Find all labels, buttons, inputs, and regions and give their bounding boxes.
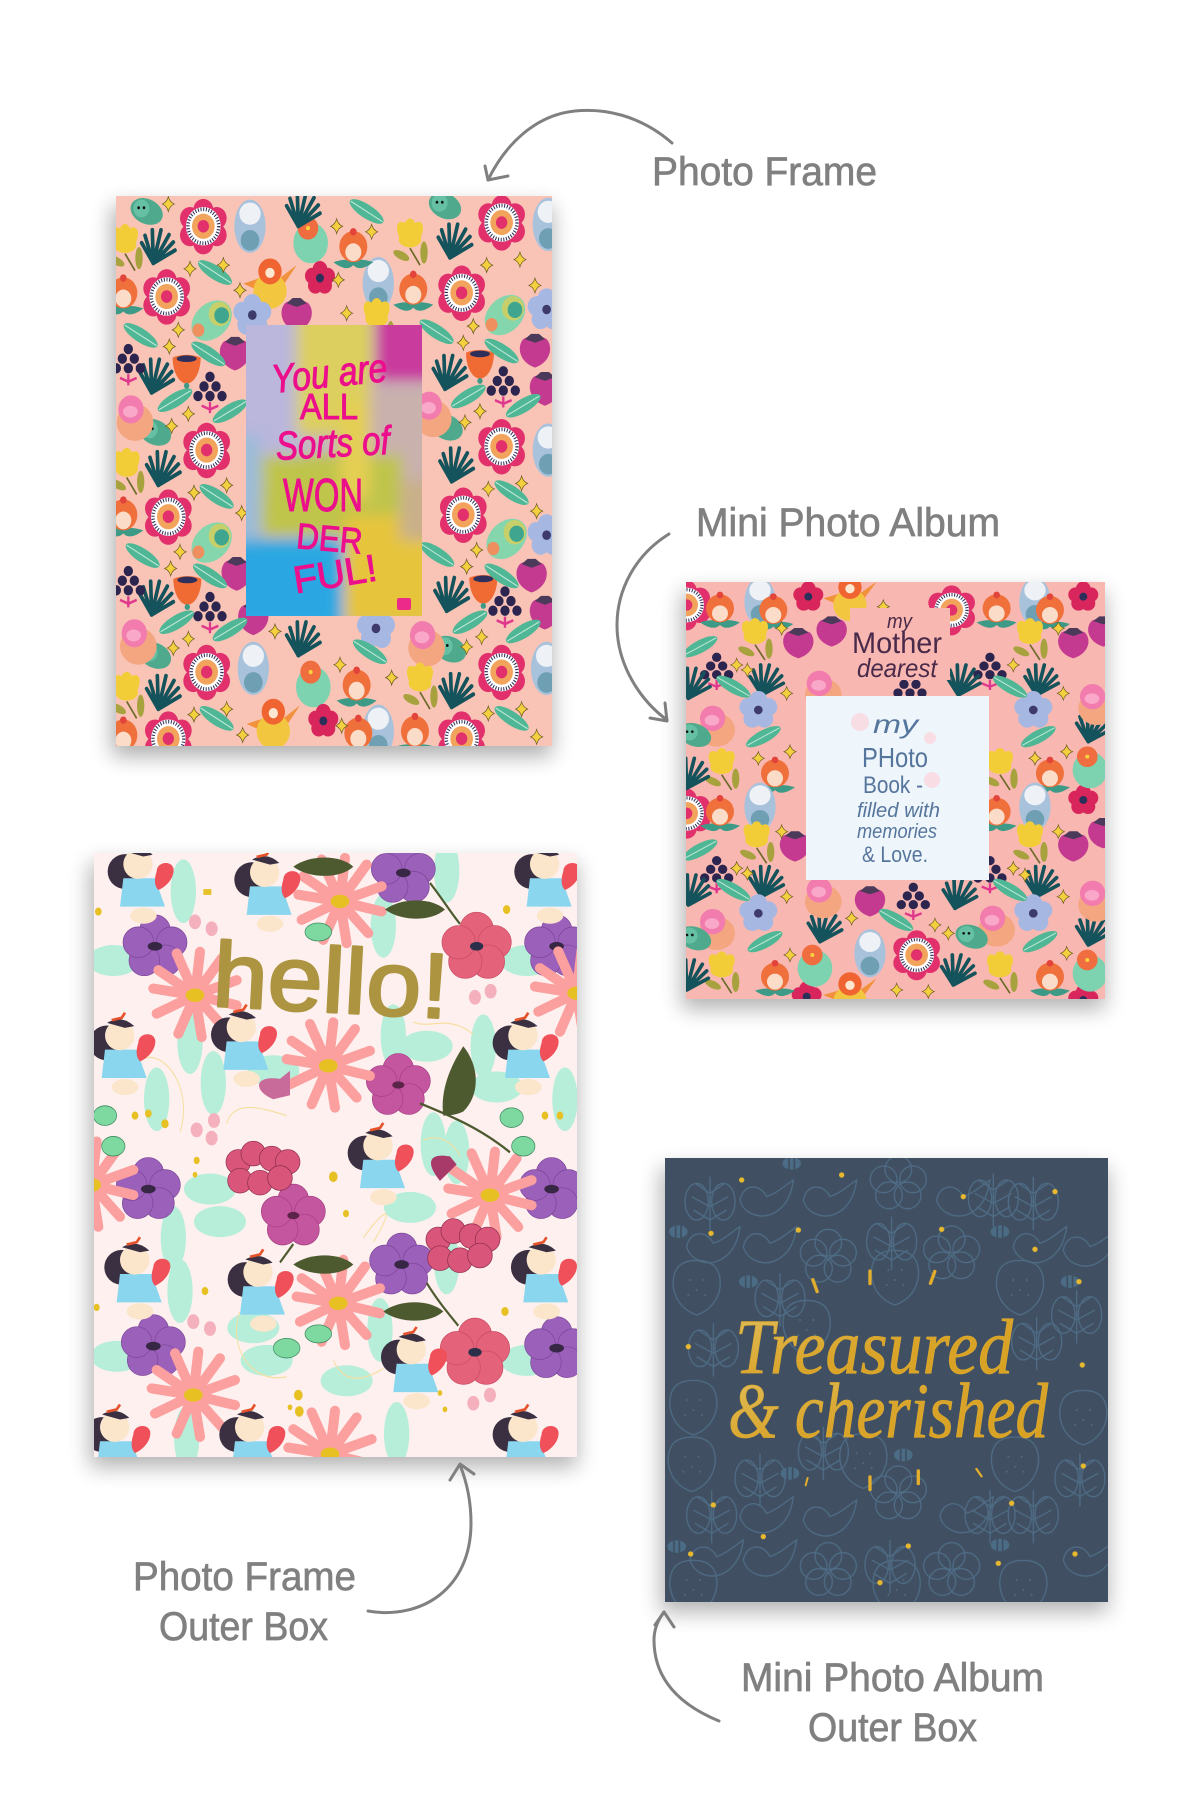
window lettering: FUL! [290, 548, 380, 602]
album window: Book - [863, 772, 923, 799]
label: mini photo album: Mini Photo Album [696, 501, 1000, 545]
frame photo window [246, 325, 422, 616]
window lettering: ALL [300, 386, 358, 427]
label: photo frame outer box: Photo Frame [133, 1555, 356, 1599]
album window [806, 696, 989, 880]
box lettering: & cherished [728, 1367, 1049, 1454]
box outline pattern [667, 1156, 1117, 1615]
box floral pattern [94, 853, 577, 1457]
arrow: mini photo album [617, 534, 669, 721]
label: mini photo album outer box: Mini Photo Album [741, 1656, 1044, 1700]
window lettering: You are [269, 346, 389, 402]
album title: my [887, 611, 913, 633]
album title: dearest [857, 653, 939, 683]
album window: filled with [857, 800, 940, 822]
window lettering: DER [295, 515, 364, 562]
panel: photo frame [103, 188, 566, 767]
album window: PHoto [862, 742, 928, 773]
frame floral pattern [103, 188, 566, 767]
arrow: photo frame outer box [368, 1464, 474, 1613]
label: photo frame outer box [133, 1555, 356, 1649]
window lettering: WON [283, 469, 363, 521]
album title [850, 608, 950, 683]
label: mini photo album outer box [741, 1656, 1044, 1750]
album window: & Love. [862, 842, 928, 867]
arrow: mini photo album outer box [654, 1612, 719, 1721]
hello lettering: hello! [210, 924, 451, 1038]
box lettering [728, 1303, 1049, 1454]
album window: my [873, 709, 921, 739]
box lettering: Treasured [735, 1303, 1014, 1390]
album floral pattern [686, 582, 1105, 999]
label: photo frame outer box: Outer Box [159, 1605, 328, 1649]
album window: memories [857, 821, 937, 843]
panel: mini photo album [663, 576, 1118, 1018]
panel: photo frame outer box [78, 850, 590, 1480]
label: mini photo album outer box: Outer Box [808, 1706, 977, 1750]
window lettering [273, 360, 392, 594]
panel: mini photo album outer box [661, 1156, 1117, 1615]
arrow: photo frame [485, 110, 672, 180]
window lettering: Sorts of [275, 419, 394, 469]
album title: Mother [852, 627, 942, 660]
label: photo frame: Photo Frame [652, 150, 877, 194]
